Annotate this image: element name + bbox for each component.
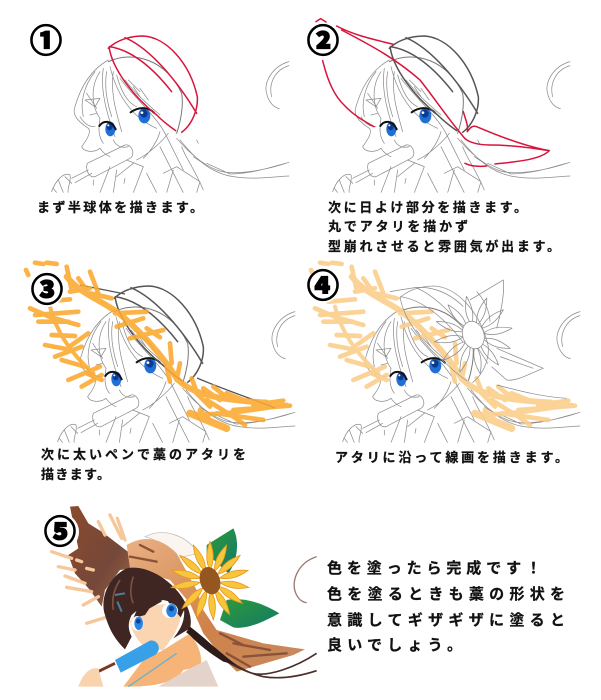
step number 5: ⑤ [44,507,76,553]
ruffled collar [158,660,218,687]
red hemisphere [108,36,197,132]
eye left [131,616,143,631]
caption 2: 丸でアタリを描かず [328,219,468,234]
near brim [127,539,305,672]
back skin and chest [123,633,201,687]
panel 4: line drawing [306,261,580,465]
sunflower [171,541,249,620]
caption 2: 次に日よけ部分を描きます。 [328,200,527,215]
line art 3 [58,307,295,443]
panel 5: finished colour illustration [52,506,317,687]
step number 3: ③ [31,265,63,311]
hair highlights [113,577,133,610]
panel 2: brim sketch [307,16,570,254]
step number 4: ④ [307,261,339,307]
eye right [162,603,178,618]
sunflower line art [390,280,567,398]
hair [103,568,191,649]
caption 3: 描きます。 [41,467,110,482]
pale straw strokes [311,263,575,428]
hand [78,668,103,687]
step number 2: ② [307,16,339,62]
caption 2: 型崩れさせると雰囲気が出ます。 [328,239,560,254]
back hair [187,632,317,678]
panel 3: thick pen brim [26,263,295,482]
top leaf [207,528,237,573]
caption 3 [41,447,246,482]
far brim [68,506,133,607]
caption 5: 意識してギザギザに塗ると [327,612,565,629]
white crown [145,533,198,558]
dark hair on brim [187,627,237,665]
caption 5: 色を塗るときも藁の形状を [327,585,565,603]
brim streaks [130,545,287,667]
grey hat outline 4 [399,286,488,382]
caption 5 [327,559,565,654]
popsicle [97,641,159,673]
lower leaf [220,599,279,628]
grey hat outline 3 [80,285,275,408]
red brim [316,19,549,166]
step number 5 halo [41,513,79,551]
caption 5: 色を塗ったら完成です！ [327,559,541,577]
face [130,604,181,650]
caption 1: まず半球体を描きます。 [37,200,203,215]
line art 1 [52,57,289,193]
straw tips left [52,515,125,623]
grey hemisphere 2 [389,36,478,132]
line art 2 [333,57,570,193]
panel 1: hemisphere sketch [30,16,289,215]
caption 2 [328,200,560,254]
bangs [133,590,186,618]
orange straw strokes [26,263,290,428]
caption 4: アタリに沿って線画を描きます。 [335,450,568,465]
step number 4 halo [306,269,340,303]
string [128,653,177,687]
step number 3 halo [30,273,64,307]
hair ornament [115,593,125,612]
line art 4 [343,307,580,443]
far crescent [294,557,317,603]
step number 1: ① [30,16,62,62]
caption 3: 次に太いペンで藁のアタリを [41,447,246,462]
caption 5: 良いでしょう。 [327,636,462,654]
